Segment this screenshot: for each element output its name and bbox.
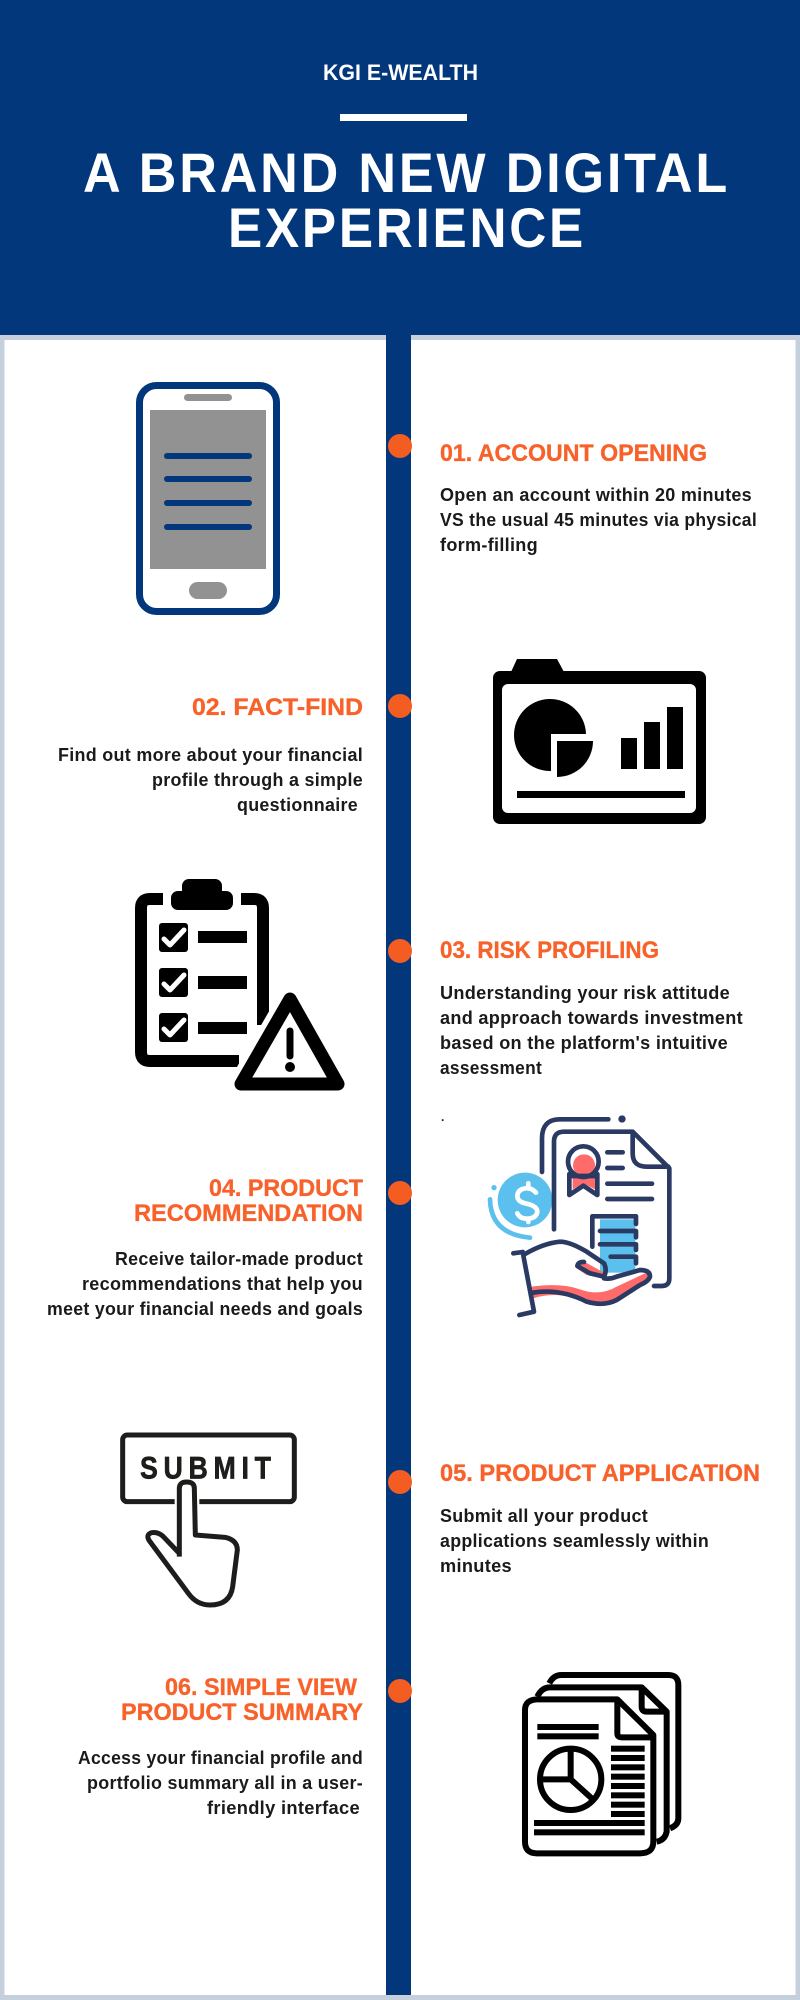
- body 06: friendly interface: [207, 1798, 360, 1818]
- body 05: minutes: [440, 1556, 512, 1576]
- heading 02: 02. FACT-FIND: [192, 694, 363, 721]
- title: EXPERIENCE: [228, 196, 586, 259]
- body 05: Submit all your product: [440, 1506, 648, 1526]
- eyebrow: KGI E-WEALTH: [323, 60, 478, 85]
- heading 05: 05. PRODUCT APPLICATION: [440, 1460, 760, 1487]
- body 06: portfolio summary all in a user-: [87, 1773, 363, 1793]
- divider rule: [340, 114, 467, 121]
- icon: smartphone: [140, 386, 276, 612]
- icon: stacked report documents: [525, 1675, 678, 1853]
- timeline spine: [386, 335, 412, 1995]
- body 01: form-filling: [440, 535, 538, 555]
- body 02: Find out more about your financial: [58, 745, 363, 765]
- body 03: [440, 983, 743, 1124]
- body 06: Access your financial profile and: [78, 1748, 363, 1768]
- body 03: .: [441, 1110, 445, 1124]
- icon: submit button with pointing hand: SUBMIT: [140, 1451, 277, 1486]
- body 02: profile through a simple: [152, 770, 363, 790]
- step 02 text: [58, 694, 363, 815]
- body 04: meet your financial needs and goals: [47, 1299, 363, 1319]
- step 05 text: [440, 1460, 760, 1576]
- icon: dashboard folder: [493, 659, 706, 824]
- body 05: [440, 1506, 709, 1576]
- heading 06: 06. SIMPLE VIEW: [165, 1674, 358, 1701]
- body 04: recommendations that help you: [82, 1274, 363, 1294]
- timeline dots: [388, 434, 412, 1703]
- step 01 text: [440, 440, 757, 555]
- body 06: [78, 1748, 363, 1818]
- step 04 text: [47, 1175, 363, 1319]
- header band: [0, 0, 800, 335]
- step 06 text: [78, 1674, 363, 1818]
- body 03: Understanding your risk attitude: [440, 983, 730, 1003]
- heading 04: [134, 1175, 363, 1227]
- heading 04: RECOMMENDATION: [134, 1200, 363, 1227]
- heading 06: PRODUCT SUMMARY: [121, 1699, 363, 1726]
- heading 06: [121, 1674, 363, 1726]
- heading 04: 04. PRODUCT: [209, 1175, 363, 1202]
- body 02: [58, 745, 363, 815]
- icon: submit button with pointing hand: [123, 1435, 294, 1605]
- body 04: [47, 1249, 363, 1319]
- title: [83, 141, 730, 259]
- heading 03: 03. RISK PROFILING: [440, 937, 659, 964]
- icon: checklist with warning: [141, 879, 338, 1084]
- body 01: [440, 485, 757, 555]
- body 02: questionnaire: [237, 795, 358, 815]
- body 03: assessment: [440, 1058, 542, 1078]
- body 03: and approach towards investment: [440, 1008, 743, 1028]
- body 05: applications seamlessly within: [440, 1531, 709, 1551]
- heading 01: 01. ACCOUNT OPENING: [440, 440, 707, 467]
- body 01: VS the usual 45 minutes via physical: [440, 510, 757, 530]
- title: A BRAND NEW DIGITAL: [83, 141, 730, 204]
- body 01: Open an account within 20 minutes: [440, 485, 752, 505]
- body 04: Receive tailor-made product: [115, 1249, 363, 1269]
- body 03: based on the platform's intuitive: [440, 1033, 728, 1053]
- step 03 text: [440, 937, 743, 1124]
- icon: document in hand with coin: [490, 1118, 669, 1315]
